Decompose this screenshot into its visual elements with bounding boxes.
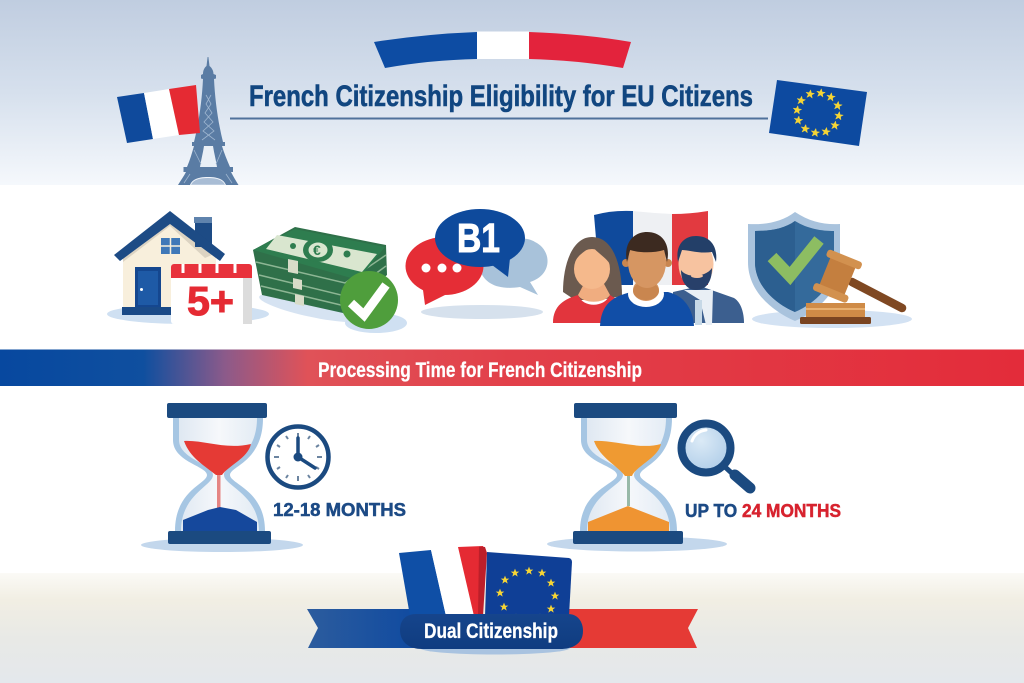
icon: B1 speech bubbles <box>406 209 548 319</box>
decoration: tricolor arc above the title <box>374 32 631 68</box>
icon: group of three people with French flag <box>553 211 744 326</box>
icon: French flag (left) <box>117 85 200 143</box>
man in suit <box>673 236 744 325</box>
icon: magnifying glass <box>682 424 750 488</box>
calendar <box>171 264 252 324</box>
ribbon tails <box>307 609 698 648</box>
icon: Eiffel Tower <box>178 57 238 185</box>
flag behind people <box>594 211 708 285</box>
gavel <box>800 249 902 324</box>
banner pill <box>400 614 583 654</box>
icon: EU flag <box>769 80 867 146</box>
header background <box>0 0 1024 185</box>
footer background <box>0 573 1024 683</box>
section band: processing time: Processing Time for French Citizenship <box>318 359 642 382</box>
icon: stack of euro banknotes with check: € <box>313 242 321 258</box>
icon: hourglass with orange sand <box>547 403 727 552</box>
icon: shield with check and gavel <box>748 212 912 328</box>
icon: B1 speech bubbles: B1 <box>457 215 500 261</box>
label: up to 24 months: UP TO 24 MONTHS <box>685 500 841 521</box>
ribbon: dual citizenship <box>307 546 698 654</box>
label: dual citizenship: Dual Citizenship <box>424 620 558 643</box>
title: French Citizenship Eligibility for EU Citizens <box>249 80 753 113</box>
icon: EU flag book <box>485 552 572 622</box>
icon: clock <box>268 426 328 488</box>
icon: house with 5+ calendar <box>107 211 269 324</box>
calendar: 5+ <box>187 278 234 324</box>
icon: hourglass with red sand <box>141 403 303 552</box>
woman <box>553 237 622 323</box>
section band: processing time <box>0 350 1024 386</box>
man in blue shirt <box>600 232 694 326</box>
label: 12-18 months: 12-18 MONTHS <box>273 499 406 520</box>
icon: stack of euro banknotes with check <box>253 227 407 333</box>
icon: French flag book <box>399 546 487 616</box>
